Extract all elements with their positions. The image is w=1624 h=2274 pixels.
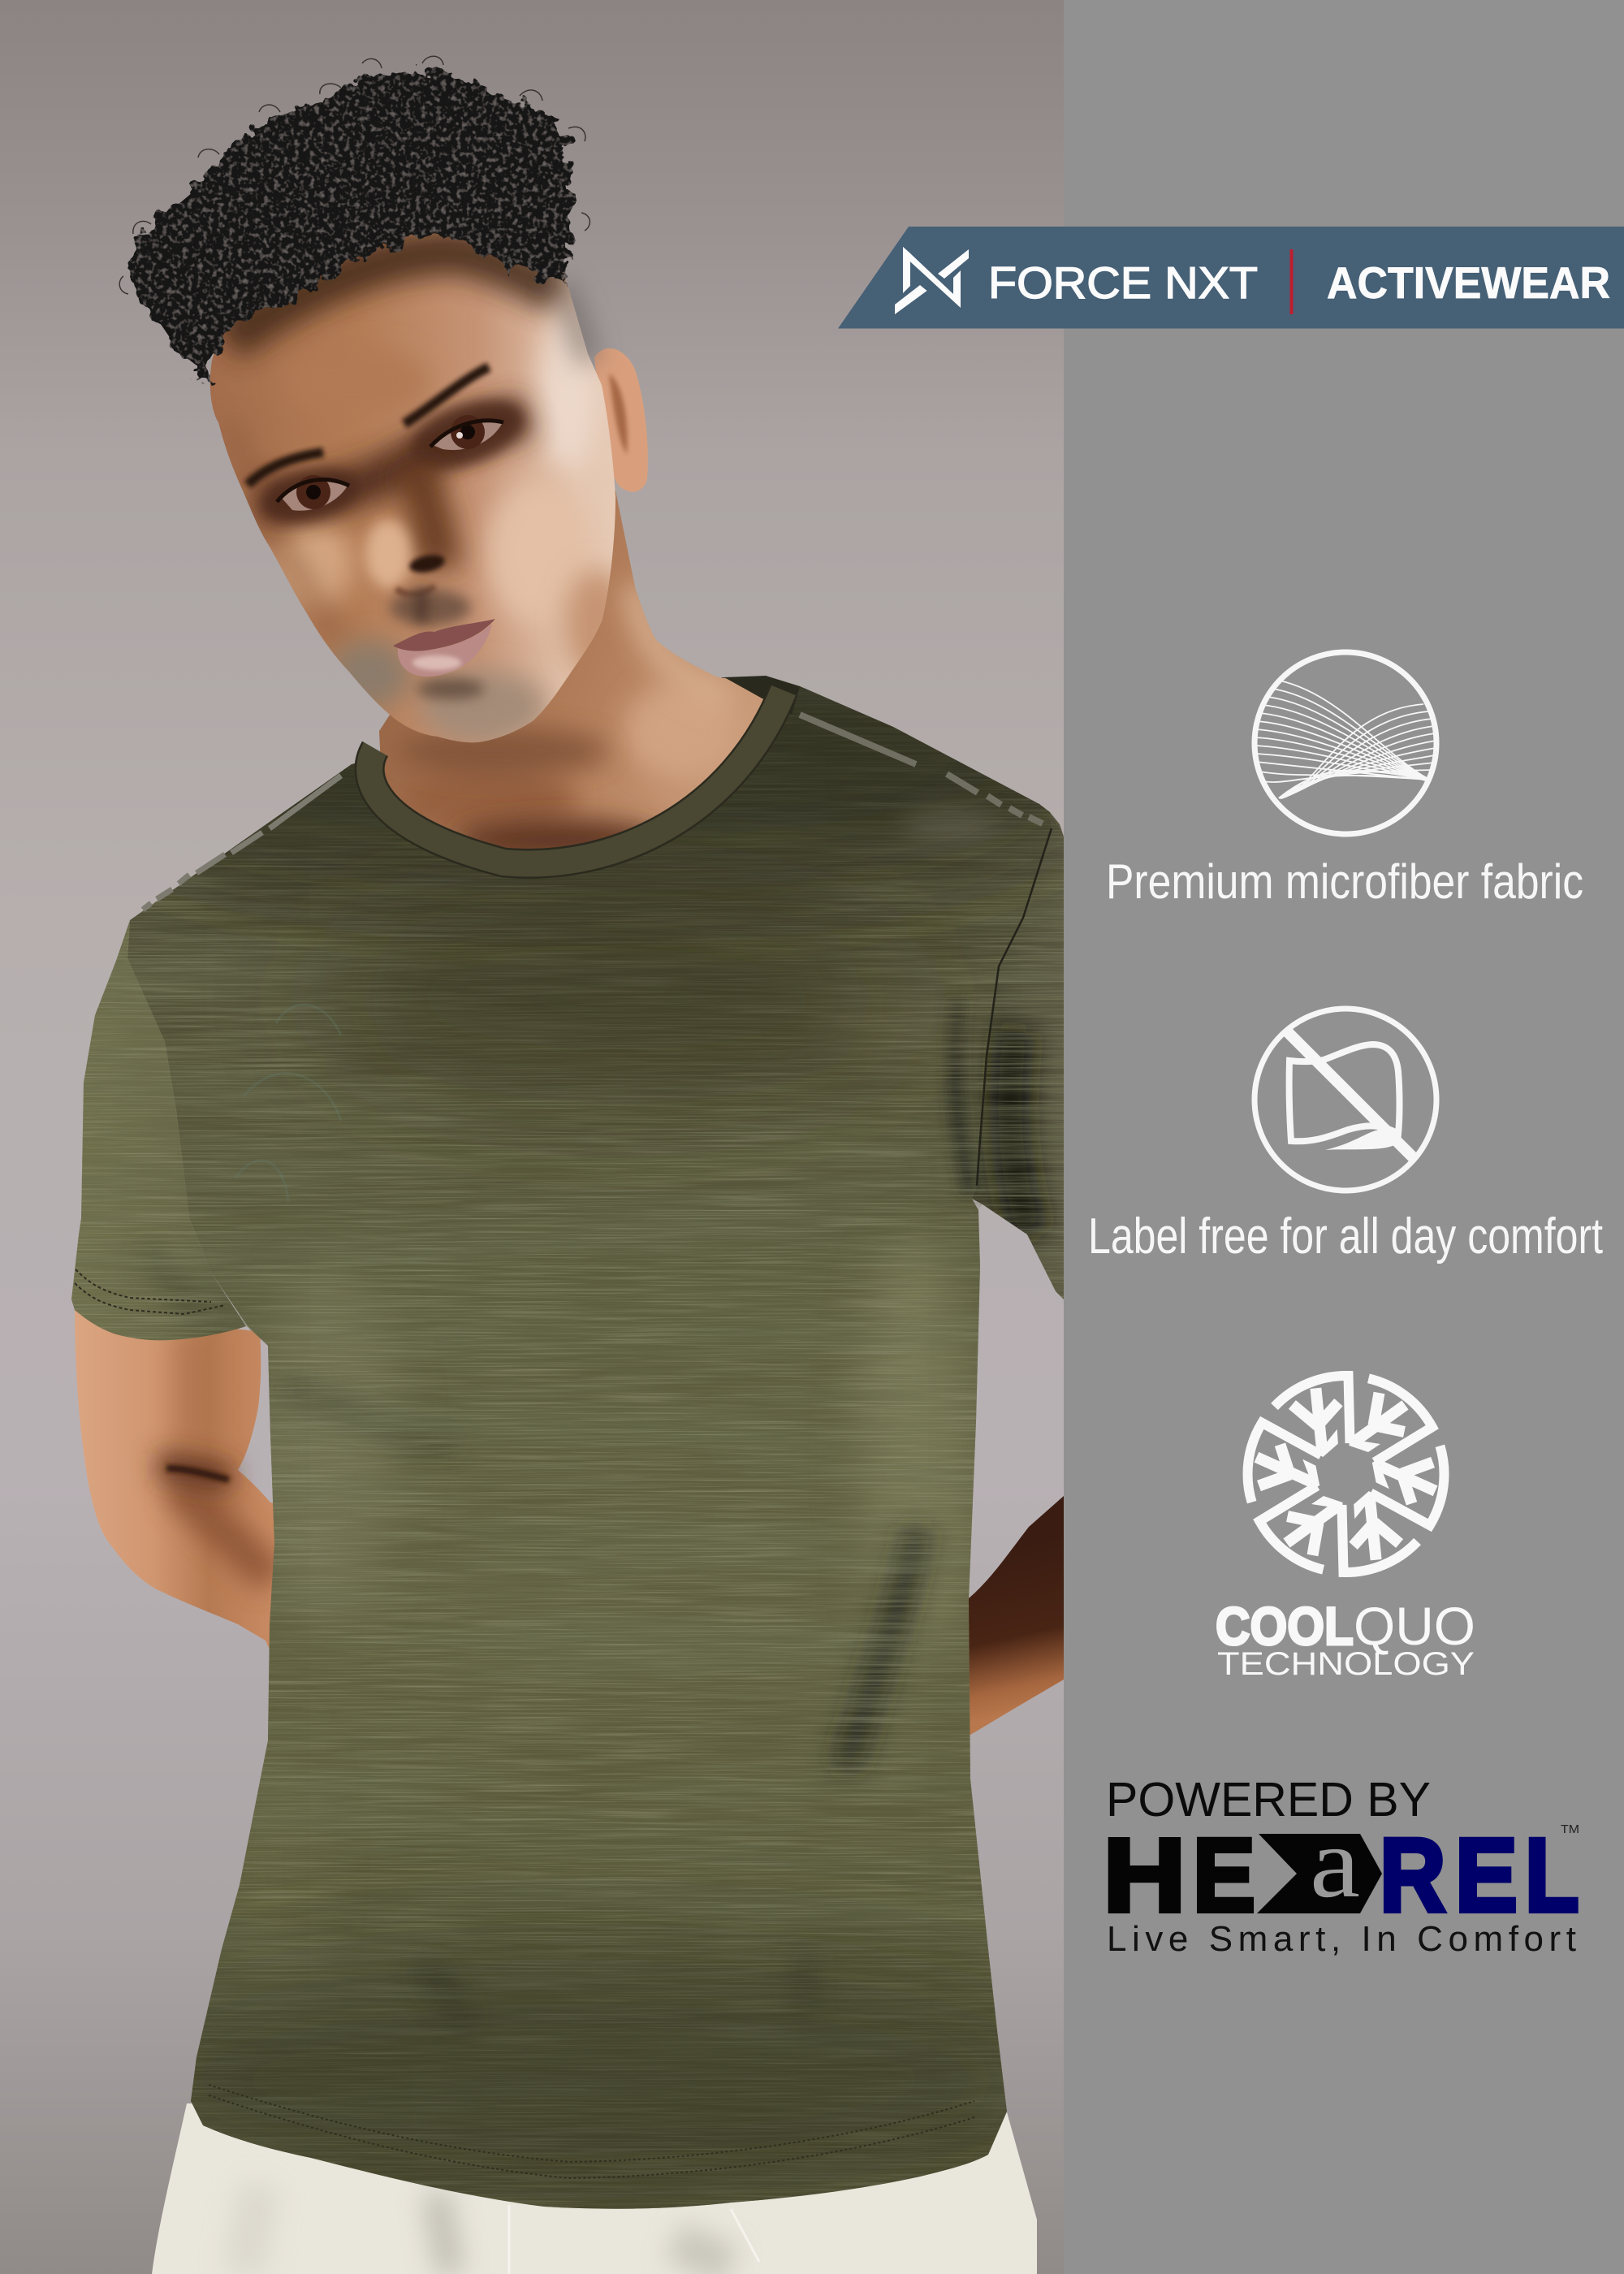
- forehead shading: [227, 252, 560, 341]
- HEX lettering: H: [1104, 1817, 1186, 1934]
- t-shirt sleeve, model's left: [972, 812, 1064, 1299]
- feature: Coolquo technology: [1216, 1363, 1475, 1682]
- red divider: [1289, 249, 1293, 314]
- t-shirt sleeve, model's right: [71, 920, 246, 1340]
- powered by: POWERED BY: [1106, 1773, 1431, 1827]
- fade at temple: [560, 284, 590, 361]
- eyebrows: [248, 367, 489, 485]
- wordmark: COOLQUO: QUO: [1354, 1596, 1475, 1656]
- grey side panel: [1064, 0, 1624, 2274]
- hair: [130, 68, 574, 385]
- hair underlay: [138, 76, 568, 370]
- eye sockets and nose shadow: [260, 414, 528, 500]
- feature: microfiber fabric: [1106, 652, 1583, 909]
- photo background: [0, 0, 1064, 2274]
- hexagon X with serif a: a: [1310, 1807, 1360, 1918]
- wordmark: COOLQUO: COOL: [1216, 1596, 1354, 1656]
- REL lettering: E: [1455, 1817, 1518, 1933]
- t-shirt torso: [127, 677, 1052, 2209]
- model's right arm: [75, 1308, 280, 1673]
- sleeve seam, model's left: [977, 828, 1052, 1186]
- icon: Force NXT logo mark: [895, 247, 969, 314]
- REL lettering: R: [1380, 1817, 1445, 1934]
- sleeve hem stitching: [75, 1269, 225, 1314]
- HEX lettering: [1104, 1817, 1255, 1934]
- icon: crossed-out garment label: [1255, 1009, 1436, 1191]
- eye, model's right: [277, 475, 349, 511]
- back collar: [724, 676, 800, 715]
- t-shirt: [71, 677, 1064, 2209]
- white trousers: [152, 2103, 1037, 2274]
- ear: [594, 348, 648, 492]
- REL lettering: [1380, 1817, 1579, 1934]
- reflective shoulder dashes: [143, 776, 341, 910]
- trademark: TM: [1561, 1822, 1579, 1836]
- REL lettering: L: [1525, 1818, 1579, 1934]
- HEX lettering: E: [1193, 1817, 1255, 1933]
- lips: [393, 619, 495, 677]
- nostril: [408, 552, 447, 575]
- brand banner: [838, 227, 1624, 328]
- wordmark: TECHNOLOGY: TECHNOLOGY: [1217, 1646, 1475, 1682]
- Hexarel sponsor logo: [1104, 1773, 1579, 1959]
- banner background: [838, 227, 1624, 328]
- neck: [357, 471, 796, 869]
- tagline: Live Smart, In Comfort: [1107, 1919, 1576, 1959]
- hexagon X with serif a: [1257, 1807, 1382, 1918]
- hem stitching: [209, 2085, 974, 2178]
- icon: woven fibres in circle: [1255, 652, 1436, 834]
- model's left forearm: [969, 1496, 1064, 1735]
- upper lip shadow: [390, 590, 471, 625]
- stray hair curls: [119, 56, 590, 294]
- brand name: FORCE NXT: [988, 257, 1258, 308]
- category name: ACTIVEWEAR: [1327, 257, 1610, 308]
- photo: male model in olive t-shirt: [0, 56, 1104, 2274]
- face: [195, 203, 633, 755]
- eye, model's left: [430, 415, 503, 450]
- feature: label free: [1088, 1009, 1603, 1265]
- front collar: [369, 690, 784, 863]
- chin and jaw stubble: [420, 670, 546, 743]
- icon: snowflake in ring: [1225, 1363, 1466, 1585]
- reflective shoulder band, model's left: [800, 715, 1043, 824]
- fabric shading and folds: [0, 617, 1104, 2233]
